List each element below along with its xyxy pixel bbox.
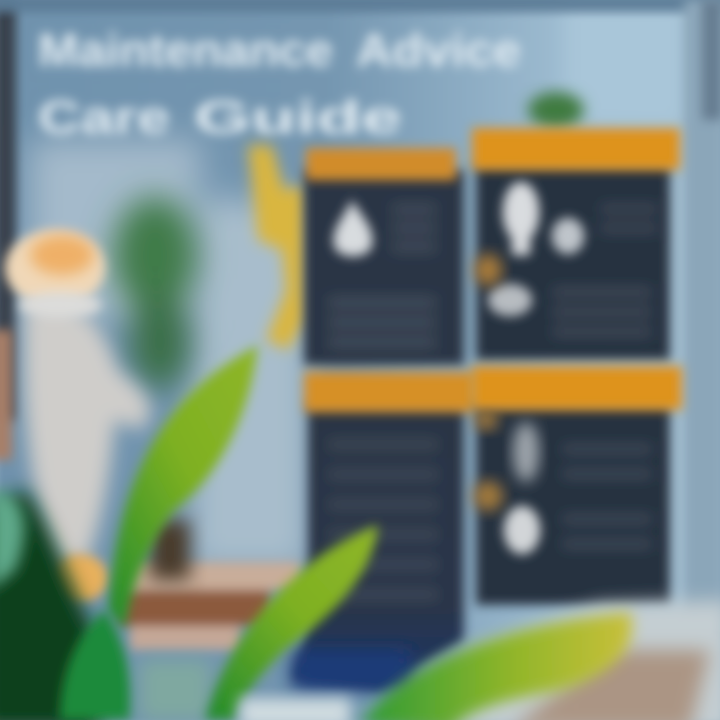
icon: orange bullet [474, 254, 502, 286]
figure: white statue with orange hat [0, 230, 150, 602]
title: Maintenance [38, 24, 333, 76]
title: Care [38, 91, 170, 143]
wooden shelf [120, 562, 300, 650]
panel: top right [472, 128, 680, 360]
panel header [472, 128, 680, 170]
panel: bottom right [472, 366, 682, 605]
green plant top [528, 92, 584, 128]
bowl with foreground leaf [240, 600, 720, 720]
title: Guide [194, 91, 402, 143]
icon: white circle [504, 506, 540, 554]
panel: top left [304, 148, 464, 365]
panel header [306, 148, 456, 180]
plant: background dark leaves [113, 197, 197, 390]
title: Advice [356, 24, 521, 76]
icon: white bottle [513, 422, 539, 482]
title [38, 24, 521, 143]
panel header [304, 372, 474, 412]
icon: orange bullet [473, 481, 503, 511]
yellow ribbon [248, 145, 305, 350]
panel: bottom left [292, 372, 474, 690]
plant: left foreground leaves [0, 345, 258, 720]
icon: white figure [488, 182, 584, 316]
icon: white drop [334, 200, 372, 256]
panel header [472, 366, 682, 410]
plant: leaf over lower-left panel [205, 525, 378, 720]
